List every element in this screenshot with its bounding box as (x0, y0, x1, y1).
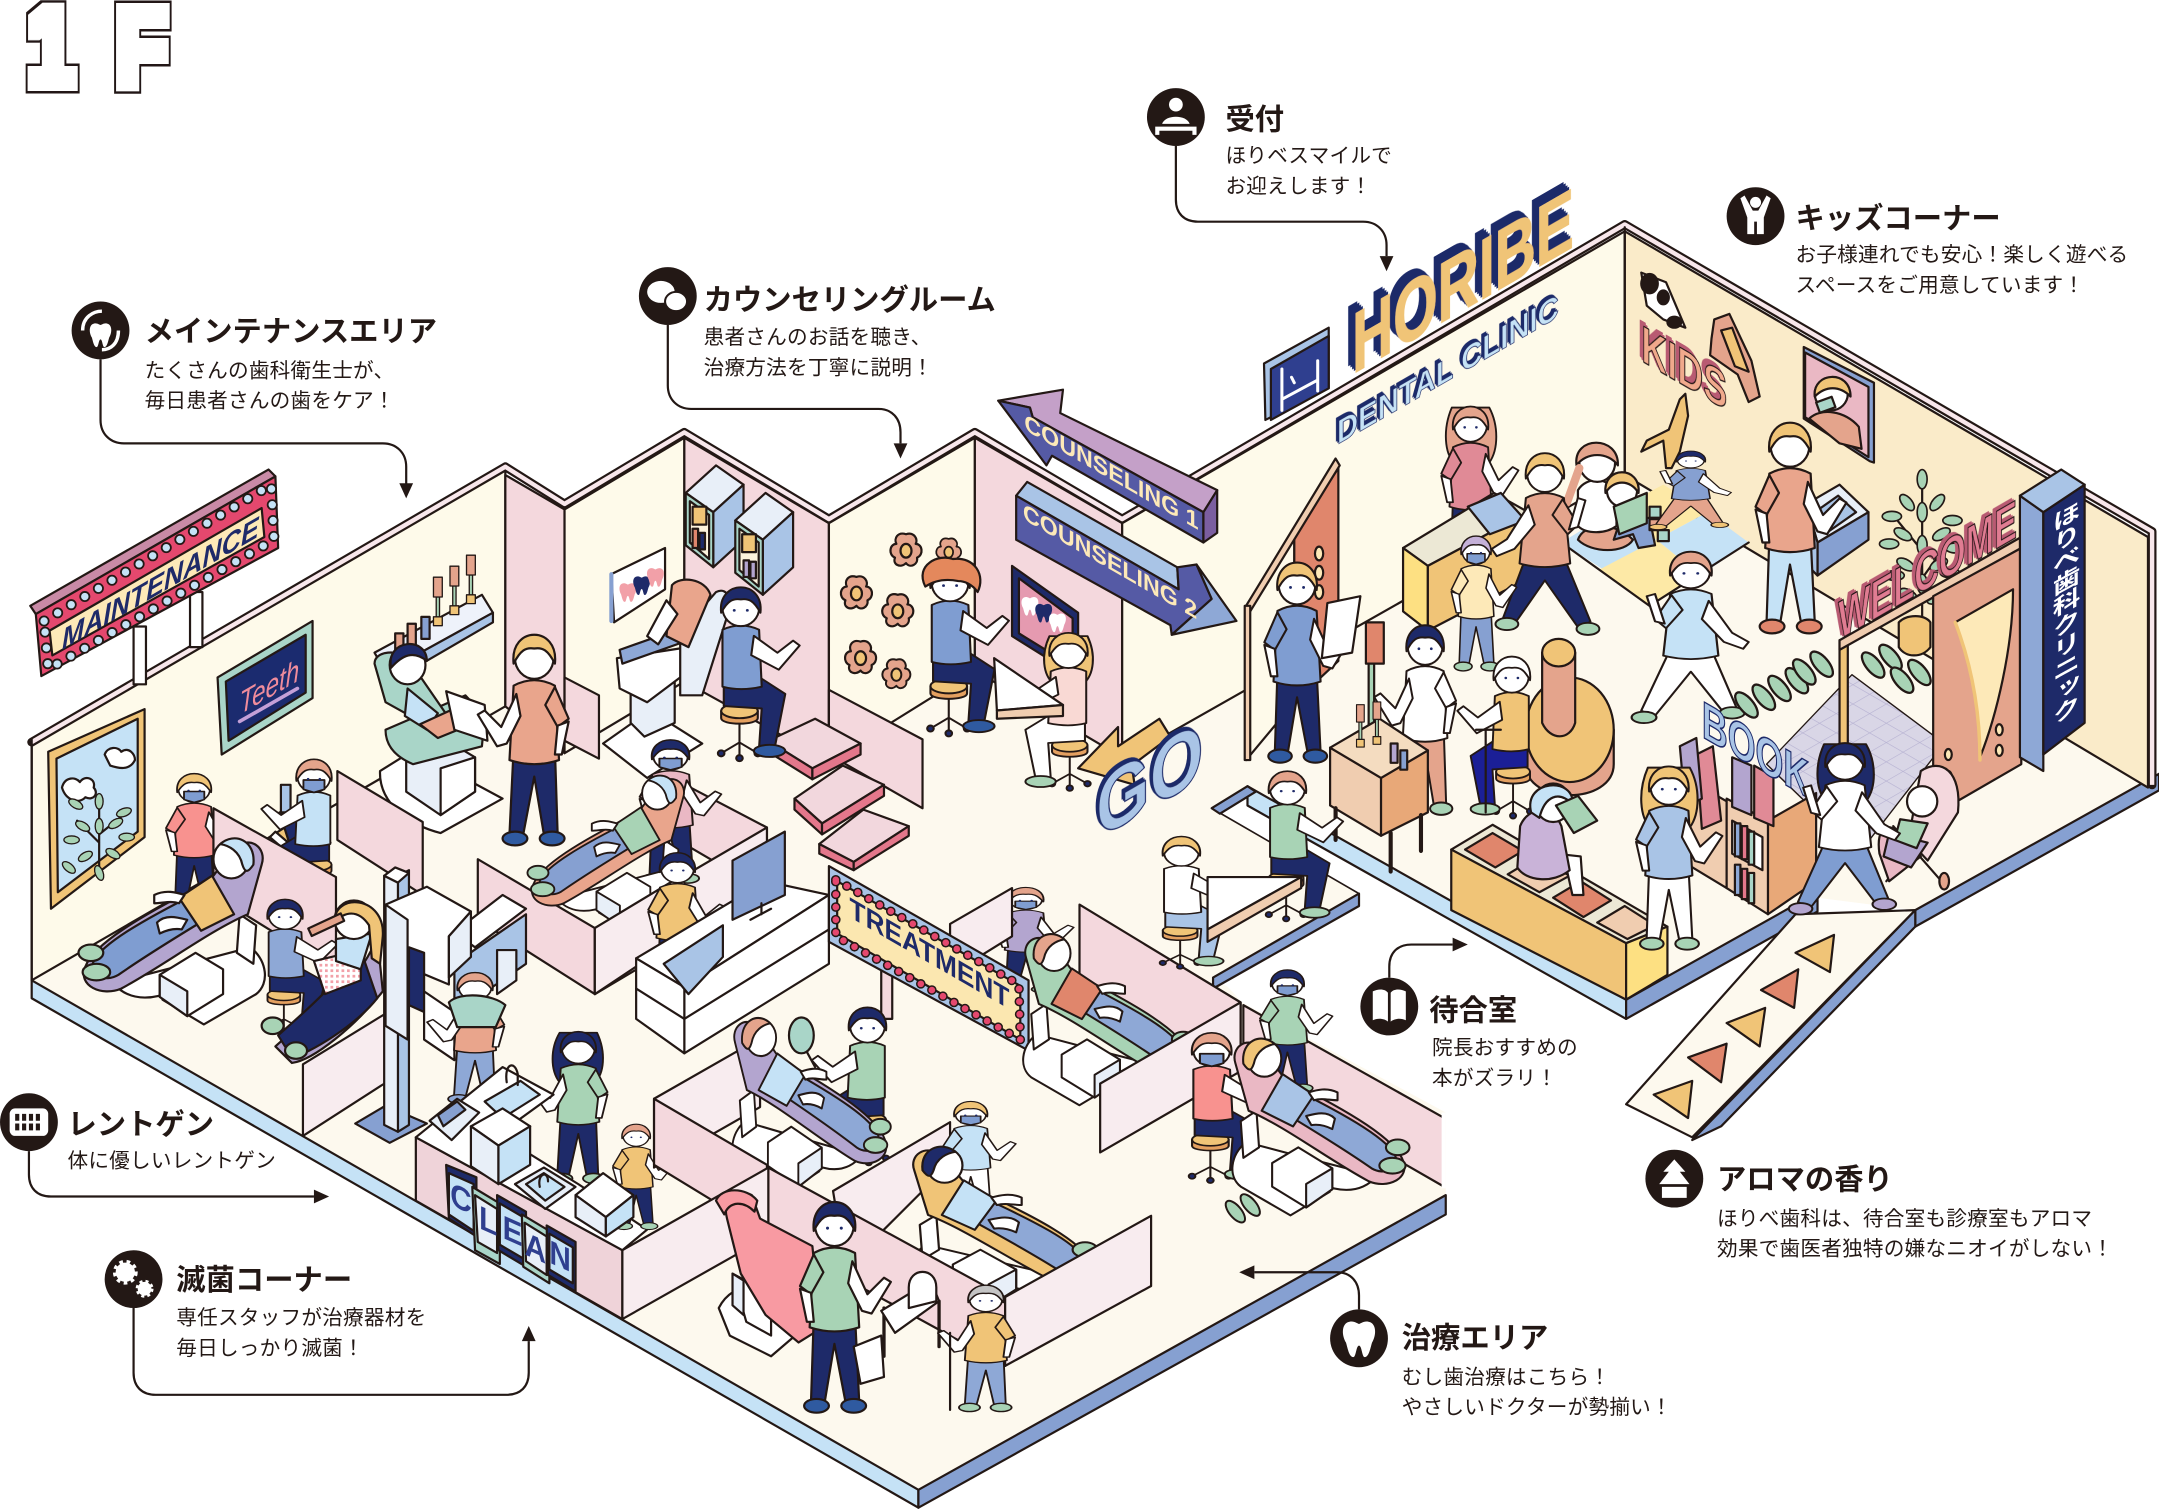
callout: maintenance: 毎日患者さんの歯をケア！ (145, 390, 395, 413)
sign: CLEAN letter boards: E (503, 1208, 522, 1254)
patient chair 6 green (1023, 934, 1195, 1105)
person: masked green staff (1260, 970, 1333, 1092)
green treatment chair (375, 644, 503, 833)
white sterilizer box (576, 1173, 633, 1236)
walls (32, 224, 2152, 980)
callout: sterilization corner (105, 1250, 536, 1395)
flowers on wall (841, 534, 961, 688)
person: woman reading on bench (1517, 783, 1597, 895)
callout: sterilization corner: 滅菌コーナー (176, 1264, 352, 1297)
callout: maintenance: メインテナンスエリア (145, 315, 437, 348)
sign: MAINTENANCE: MAINTENANCE (62, 511, 259, 657)
sign: TREATMENT: TREATMENT (850, 892, 1010, 1016)
patient chair center front panel (595, 876, 682, 994)
sterilizing counter (416, 1065, 647, 1319)
low cabinet with products (1330, 702, 1428, 872)
sign: TREATMENT (829, 866, 1029, 1051)
platform desk (1208, 877, 1301, 942)
callout: treatment area: やさしいドクターが勢揃い！ (1402, 1396, 1672, 1419)
patient chair lavender (732, 1018, 891, 1195)
person: seated staff in counseling (716, 587, 800, 761)
maintenance partition left (213, 808, 336, 971)
callout: aroma: ほりべ歯科は、待合室も診療室もアロマ (1717, 1207, 2092, 1230)
sign: GO arrow: GO (1096, 702, 1203, 859)
person: man brushing teeth (1756, 423, 1846, 633)
hoodie hood (449, 995, 505, 1027)
callout: x-ray: レントゲン (67, 1109, 214, 1142)
callout: aroma: アロマの香り (1717, 1164, 1893, 1197)
callout: x-ray (0, 1093, 329, 1203)
sign: COUNSELING 2 arrow (1016, 482, 1236, 635)
tooth chart poster (611, 548, 665, 622)
person: reception staff at desk (648, 853, 725, 996)
person: blond girl in blue dress (1636, 766, 1722, 950)
counter desk and center bay (478, 781, 767, 994)
steps (768, 719, 909, 870)
counseling chair and patient (603, 580, 730, 778)
paper in hand (1322, 596, 1360, 658)
callout: sterilization corner: 毎日しっかり滅菌！ (176, 1337, 364, 1360)
person: blond patient at platform desk (1157, 837, 1237, 969)
callout: aroma (1645, 1150, 2113, 1261)
person: curly counselor (925, 563, 1009, 736)
callout: treatment area (1239, 1265, 1672, 1419)
partition between bays (1100, 1002, 1241, 1152)
sign: CLEAN letter boards: A (525, 1224, 546, 1271)
stroller with baby (1867, 766, 1958, 889)
sign: Teeth board (218, 621, 313, 755)
callout: counseling room: カウンセリングルーム (704, 284, 996, 317)
callout: sterilization corner: 専任スタッフが治療器材を (176, 1307, 426, 1330)
person: kid with stripes (1451, 536, 1517, 671)
person: nurse center (640, 740, 721, 883)
sign: COUNSELING 1 arrow: COUNSELING 1 (1024, 409, 1199, 535)
entrance gate (1838, 487, 2021, 815)
treatment bay upper partition (654, 1038, 760, 1168)
callout: kids corner: キッズコーナー (1795, 202, 2001, 236)
callout: aroma: 効果で歯医者独特の嫌なニオイがしない！ (1717, 1238, 2113, 1261)
door partition (1245, 459, 1340, 760)
kids corner rug (1561, 485, 1749, 606)
person: staff washing (530, 1032, 608, 1183)
person: staff pointing on platform (1264, 771, 1343, 921)
hygienist with mask (166, 774, 240, 911)
counseling monitor (1012, 566, 1078, 677)
callout: counseling room: 患者さんのお話を聴き、 (704, 326, 931, 349)
callout: kids corner: お子様連れでも安心！楽しく遊べる (1795, 244, 2128, 267)
sign: CLEAN letter boards: L (479, 1198, 497, 1243)
callout: treatment area: 治療エリア (1402, 1322, 1548, 1355)
waiting bench (1451, 825, 1667, 1000)
callout: waiting room: 本がズラリ！ (1432, 1067, 1557, 1090)
paper under hand (854, 1336, 884, 1384)
plant and pot (1879, 470, 1965, 655)
sign: HORIBE: HORIBE (1352, 170, 1574, 394)
callout: kids corner: スペースをご用意しています！ (1795, 274, 2084, 297)
patient chair center (527, 776, 686, 934)
callout: reception: ほりベスマイルで (1225, 144, 1392, 167)
entrance gate: WELCOME (1838, 487, 2017, 652)
tooth-shaped chair (881, 1272, 939, 1356)
kids wall decorations: KIDS (1641, 315, 1727, 422)
cabinets on counseling wall (686, 465, 793, 595)
slippers floor right (1222, 1191, 1263, 1226)
hand mirror (789, 1018, 815, 1067)
patient chair 1 (79, 838, 265, 1024)
right pink partition (1243, 1005, 1444, 1187)
person: seated mother reading on rug (1567, 443, 1669, 550)
person: girl with green hoodie (427, 973, 504, 1103)
person: seated staff with clipboard (262, 899, 338, 1034)
person: nurse from back (478, 635, 569, 845)
sign: DENTAL CLINIC: DENTAL CLINIC (1337, 288, 1559, 453)
lower partitions (622, 1168, 1151, 1366)
callout: maintenance (72, 302, 437, 498)
callout: x-ray: 体に優しいレントゲン (67, 1150, 276, 1173)
patient chair navy (262, 900, 383, 1063)
patient chair 7 pink (1232, 1039, 1409, 1215)
reception counter (1403, 493, 1528, 631)
vertical clinic sign (2020, 470, 2085, 771)
callout: reception: お迎えします！ (1225, 175, 1371, 198)
person: elderly woman with cane (938, 1285, 1015, 1412)
person: mother with long hair (1789, 743, 1900, 914)
person: girl running (1632, 552, 1749, 723)
person: woman with orange sweater (1492, 453, 1599, 635)
callout: counseling room (639, 267, 996, 459)
maintenance microscope and staff (256, 759, 337, 908)
person: reception staff (1441, 406, 1519, 575)
sign: COUNSELING 2 arrow: COUNSELING 2 (1023, 498, 1197, 625)
person: patient seated at counseling desk (1011, 633, 1093, 791)
sign: CLEAN letter boards (446, 1165, 576, 1292)
person: masked dentist blond (943, 1101, 1016, 1213)
sign: Teeth board: Teeth (240, 651, 299, 722)
sign: CLEAN letter boards: C (450, 1175, 472, 1221)
curly hair (923, 558, 980, 592)
callout: kids corner (1727, 187, 2128, 297)
callout: treatment area: むし歯治療はこちら！ (1402, 1366, 1610, 1389)
partition pair near lavender chair (654, 1099, 950, 1234)
entrance floor mat (1767, 675, 1944, 854)
person: staff with paper (1264, 563, 1351, 763)
big toothbrush (1366, 622, 1384, 734)
callout: reception: 受付 (1225, 103, 1284, 136)
callout: counseling room: 治療方法を丁寧に説明！ (704, 357, 933, 380)
person: seated green staff (812, 1007, 891, 1165)
partitions back of treatment bay (950, 888, 1241, 1071)
person: lilac masked hygienist (997, 887, 1074, 993)
counseling desk (994, 658, 1063, 719)
person: boy (1649, 451, 1731, 530)
wall shelf with toothbrushes (375, 555, 493, 682)
person: yellow top staff (613, 1124, 675, 1230)
window with tree (48, 709, 145, 909)
white desk with monitor and laptop (636, 832, 829, 1053)
maintenance partition right (337, 771, 423, 895)
person: green staff with paper (800, 1202, 891, 1413)
sign: CLEAN letter boards: N (549, 1232, 571, 1279)
person: toothbrush holder (1374, 625, 1456, 815)
X-ray machine (355, 867, 526, 1143)
mirror with reflection (1804, 347, 1874, 463)
vertical clinic sign: ほりべ歯科クリニック (2049, 498, 2080, 730)
callout: reception (1147, 88, 1393, 271)
person: seated coral dentist (1186, 1033, 1271, 1183)
sign: BOOK: BOOK (1702, 691, 1809, 811)
clipboard (1468, 493, 1526, 534)
floor plan: floor and slab (32, 413, 2159, 1508)
cane (1476, 730, 1501, 812)
kids wall decorations (1641, 273, 1760, 468)
patient chair yellow (911, 1147, 1097, 1314)
bookshelf (1674, 738, 1816, 914)
callout: waiting room (1360, 938, 1578, 1090)
callout: waiting room: 待合室 (1429, 994, 1517, 1027)
maintenance bay front partition (303, 1005, 399, 1136)
sign: COUNSELING 1 arrow (998, 390, 1217, 542)
clinic logo (1264, 328, 1329, 420)
callout: maintenance: たくさんの歯科衛生士が、 (145, 359, 394, 382)
sign: MAINTENANCE (30, 470, 278, 684)
person: elderly man seated (1457, 657, 1535, 819)
sink (1806, 485, 1868, 576)
empty coral chair (716, 1190, 821, 1356)
ramp with arrows (1626, 910, 1915, 1140)
slippers row (1731, 641, 1935, 721)
callout: waiting room: 院長おすすめの (1432, 1037, 1578, 1060)
column seat (1526, 639, 1614, 795)
